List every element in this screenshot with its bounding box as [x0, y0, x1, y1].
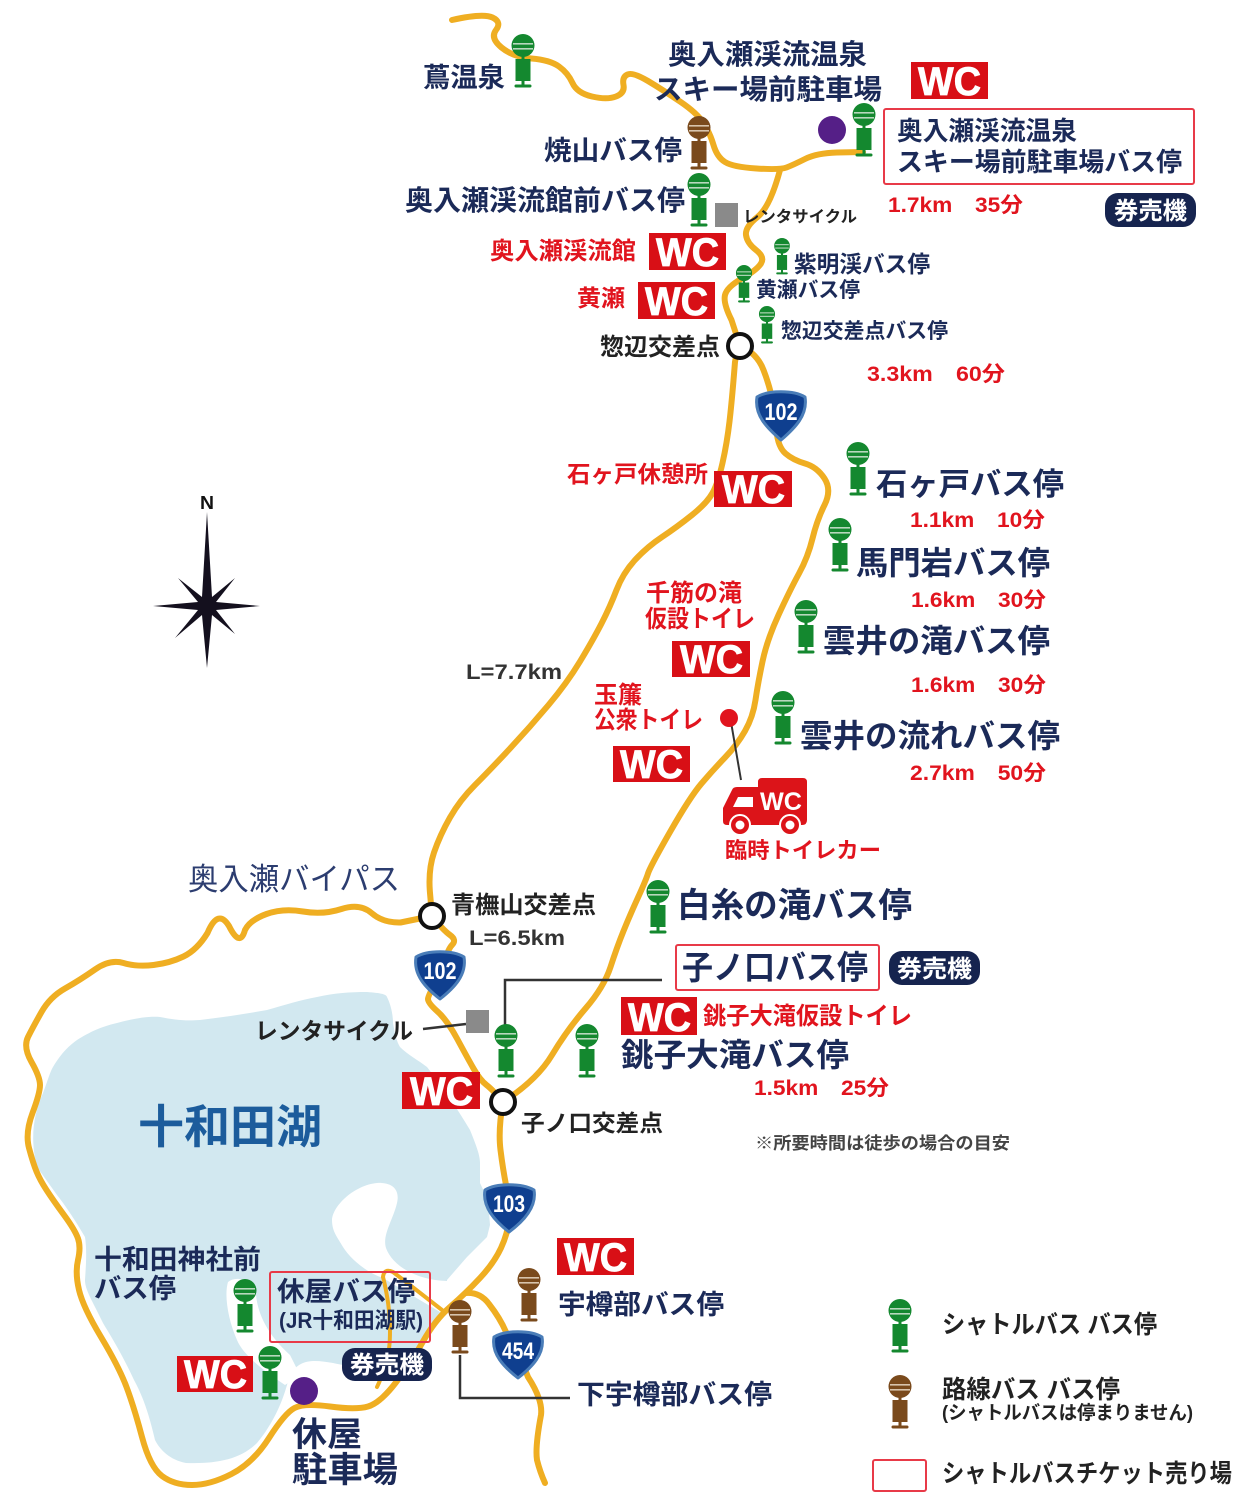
- ticket machine badge 休屋: 券売機: [350, 1352, 424, 1379]
- ticket counter box: ski resort: [884, 109, 1194, 184]
- parking dot: 休屋: [290, 1377, 318, 1405]
- route shield 102 south: [416, 952, 464, 999]
- WC badges: WC: [656, 231, 719, 275]
- distance 1.1km: 1.1km 10分: [910, 509, 1045, 532]
- rental cycle square north: [715, 203, 738, 227]
- WC badges: WC: [620, 743, 683, 787]
- parking dot: ski resort: [818, 116, 846, 144]
- heading: ski parking: スキー場前駐車場: [654, 74, 882, 105]
- label: 千筋の滝 toilet: 千筋の滝: [646, 580, 742, 607]
- label: 黄瀬バス停: 黄瀬バス停: [756, 279, 860, 302]
- label: 銚子大滝仮設トイレ: 銚子大滝仮設トイレ: [703, 1003, 912, 1030]
- label: 奥入瀬渓流館前バス停: 奥入瀬渓流館前バス停: [405, 185, 685, 216]
- label: 白糸の滝バス停: 白糸の滝バス停: [677, 887, 912, 925]
- icon: toilet truck: WC: [760, 788, 802, 816]
- label: ski parking bus stop: スキー場前駐車場バス停: [897, 147, 1182, 177]
- legend: shuttle stop: シャトルバス バス停: [942, 1311, 1157, 1339]
- distance 3.3km: 3.3km 60分: [867, 363, 1005, 386]
- label: ski parking bus stop: 奥入瀬渓流温泉: [897, 116, 1077, 146]
- route shield 454: [494, 1332, 542, 1378]
- label: 休屋バス停: [277, 1277, 423, 1333]
- distance 1.5km: 1.5km 25分: [754, 1077, 889, 1100]
- roads: [26, 16, 863, 1485]
- heading: ski parking: 奥入瀬渓流温泉: [668, 39, 867, 70]
- ticket counter box: 子ノ口: [676, 945, 879, 990]
- label: 奥入瀬バイパス: 奥入瀬バイパス: [188, 862, 400, 897]
- WC badges: WC: [564, 1236, 627, 1280]
- distance 1.7km: 1.7km 35分: [888, 194, 1023, 217]
- label: 紫明渓バス停: 紫明渓バス停: [794, 251, 930, 277]
- ticket machine badge 休屋: [342, 1348, 432, 1381]
- label: 石ヶ戸休憩所: 石ヶ戸休憩所: [567, 461, 708, 487]
- label: L=6.5km: L=6.5km: [469, 927, 565, 950]
- bus stop icons: shuttle: [234, 34, 876, 1400]
- label: 臨時トイレカー: 臨時トイレカー: [725, 838, 881, 863]
- label: 馬門岩バス停: 馬門岩バス停: [856, 545, 1050, 581]
- label: 子ノ口バス停: 子ノ口バス停: [682, 949, 868, 986]
- label: ski parking bus stop: [897, 116, 1182, 177]
- label: 休屋バス停: 休屋バス停: [277, 1277, 415, 1307]
- public toilet dot: [720, 709, 738, 727]
- legend: route bus stop: [888, 1375, 1193, 1428]
- label: 千筋の滝 toilet: 仮設トイレ: [645, 606, 755, 633]
- legend: shuttle stop: [888, 1299, 1157, 1352]
- compass: N: [200, 493, 214, 513]
- WC badges: WC: [628, 996, 691, 1040]
- WC badges: WC: [184, 1353, 247, 1397]
- label: 休屋駐車場: 休屋: [292, 1416, 362, 1454]
- label: 下宇樽部バス停: 下宇樽部バス停: [577, 1380, 772, 1410]
- icon: toilet truck: [723, 778, 807, 835]
- footnote: ※所要時間は徒歩の場合の目安: [755, 1134, 1010, 1153]
- distance 1.6km second: 1.6km 30分: [911, 674, 1046, 697]
- intersection: 惣辺: [728, 334, 752, 358]
- ticket machine badge north: [1105, 193, 1196, 227]
- compass: [153, 493, 260, 668]
- lake Towada: [33, 992, 490, 1463]
- ticket machine badge north: 券売機: [1114, 198, 1187, 225]
- route shield 102 north: [757, 392, 805, 440]
- label: 銚子大滝バス停: 銚子大滝バス停: [621, 1037, 849, 1073]
- bus stop icons: route bus: [448, 116, 710, 1354]
- legend: ticket counter: [873, 1460, 1232, 1491]
- rental cycle square south: [466, 1010, 489, 1033]
- legend: route bus stop: 路線バス バス停: [942, 1376, 1120, 1404]
- ticket counter box: 休屋: [270, 1272, 430, 1342]
- intersection: 子ノ口: [491, 1090, 515, 1114]
- label: 玉簾 toilet: 公衆トイレ: [594, 707, 703, 734]
- label: rental cycle north: レンタサイクル: [743, 208, 857, 226]
- WC badges: [177, 60, 988, 1397]
- label: 休屋バス停: (JR十和田湖駅): [279, 1308, 423, 1333]
- label: L=7.7km: L=7.7km: [466, 661, 562, 684]
- legend: route bus stop: (シャトルバスは停まりません): [942, 1402, 1193, 1424]
- route shield 103: [485, 1185, 534, 1232]
- label: 十和田神社前バス停: 十和田神社前: [94, 1245, 261, 1275]
- label: 玉簾 toilet: [594, 682, 703, 734]
- label: 玉簾 toilet: 玉簾: [594, 682, 642, 709]
- route shield 102 north: 102: [764, 399, 798, 426]
- label: 十和田神社前バス停: [94, 1245, 261, 1304]
- label: 黄瀬: 黄瀬: [577, 285, 625, 311]
- label: 焼山バス停: 焼山バス停: [544, 136, 682, 166]
- label: lake name: 十和田湖: [138, 1101, 322, 1153]
- label: 青橅山交差点: 青橅山交差点: [451, 892, 596, 919]
- label: 千筋の滝 toilet: [645, 580, 755, 633]
- label: 惣辺交差点バス停: 惣辺交差点バス停: [781, 320, 948, 343]
- distance 2.7km: 2.7km 50分: [910, 762, 1046, 785]
- WC badges: WC: [722, 468, 785, 512]
- route shield 454: 454: [502, 1338, 535, 1365]
- WC badges: WC: [680, 638, 743, 682]
- route shield 103: 103: [493, 1191, 525, 1218]
- ticket machine badge 子ノ口: [889, 951, 980, 985]
- label: 雲井の滝バス停: 雲井の滝バス停: [823, 623, 1050, 659]
- WC badges: WC: [918, 60, 981, 104]
- label: 奥入瀬渓流館: 奥入瀬渓流館: [490, 238, 636, 265]
- ticket machine badge 子ノ口: 券売機: [897, 956, 972, 983]
- label: 惣辺交差点: 惣辺交差点: [600, 334, 720, 361]
- label: 子ノ口交差点: 子ノ口交差点: [521, 1110, 663, 1136]
- intersection: 青橅山: [420, 904, 444, 928]
- label: 休屋駐車場: [292, 1416, 398, 1490]
- WC badges: WC: [645, 280, 708, 324]
- distance 1.6km first: 1.6km 30分: [911, 589, 1046, 612]
- label: 休屋駐車場: 駐車場: [292, 1451, 398, 1490]
- label: rental cycle south: レンタサイクル: [255, 1018, 413, 1044]
- heading: ski parking: [654, 39, 882, 105]
- legend: [873, 1299, 1232, 1491]
- label: 十和田神社前バス停: バス停: [94, 1274, 176, 1304]
- label: 雲井の流れバス停: 雲井の流れバス停: [800, 718, 1060, 754]
- label: 石ヶ戸バス停: 石ヶ戸バス停: [876, 467, 1064, 502]
- label: 蔦温泉: 蔦温泉: [423, 63, 505, 93]
- route shield 102 south: 102: [424, 958, 456, 985]
- leader lines: [423, 722, 741, 1398]
- WC badges: WC: [410, 1070, 473, 1114]
- label: 宇樽部バス停: 宇樽部バス停: [558, 1290, 724, 1320]
